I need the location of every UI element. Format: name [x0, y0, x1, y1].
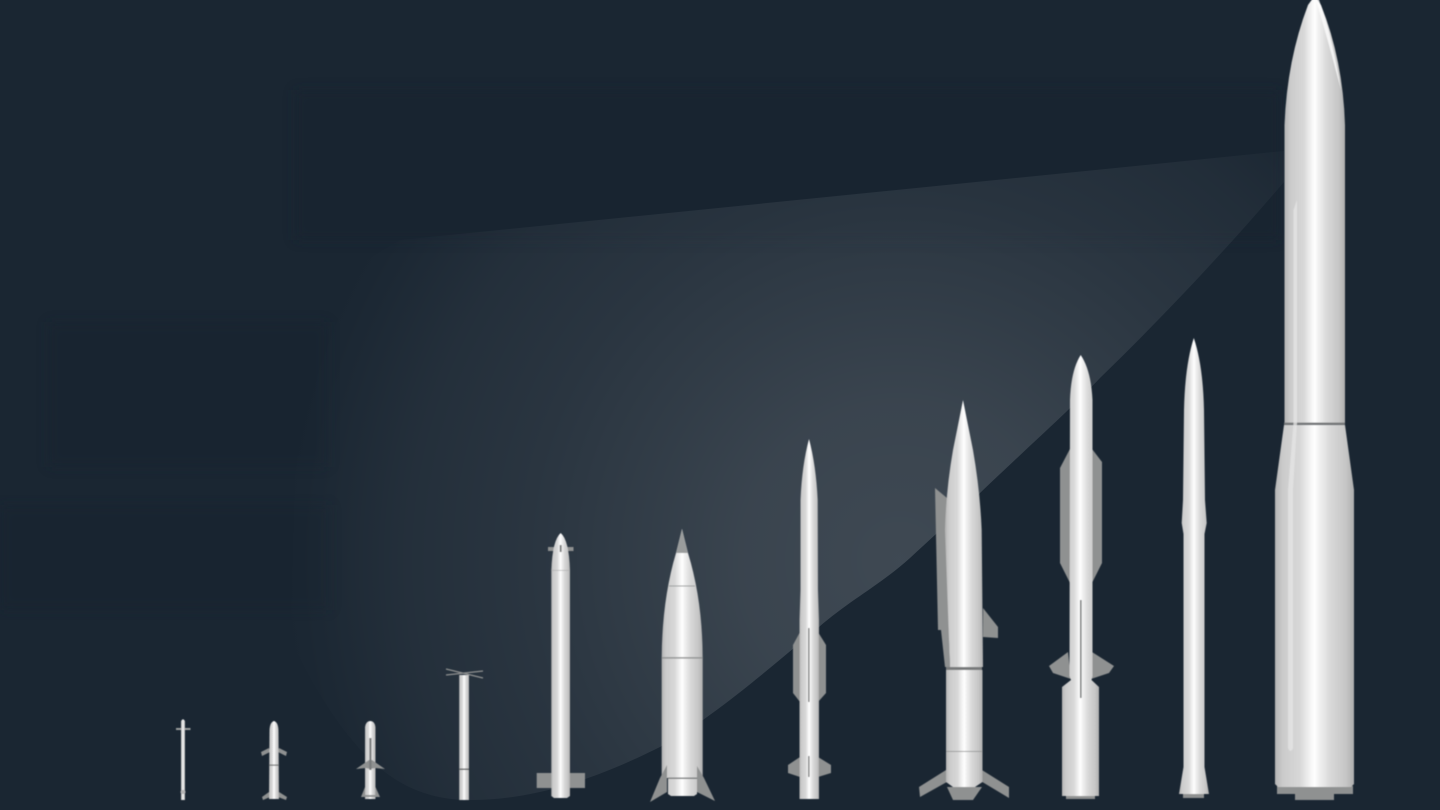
missile 3 [356, 721, 385, 799]
light beam rising from left to the largest missile [290, 151, 1284, 800]
missile 7 [788, 439, 831, 799]
missile 9 [1049, 355, 1114, 799]
missile 5 [537, 533, 585, 798]
missile 6 [650, 529, 715, 802]
missile 8 [919, 400, 1009, 800]
missile 2 [261, 721, 287, 800]
missile 4 [446, 669, 483, 800]
missile 1 [176, 719, 190, 800]
missile 11 [1275, 0, 1354, 800]
missile 10 [1179, 338, 1209, 798]
